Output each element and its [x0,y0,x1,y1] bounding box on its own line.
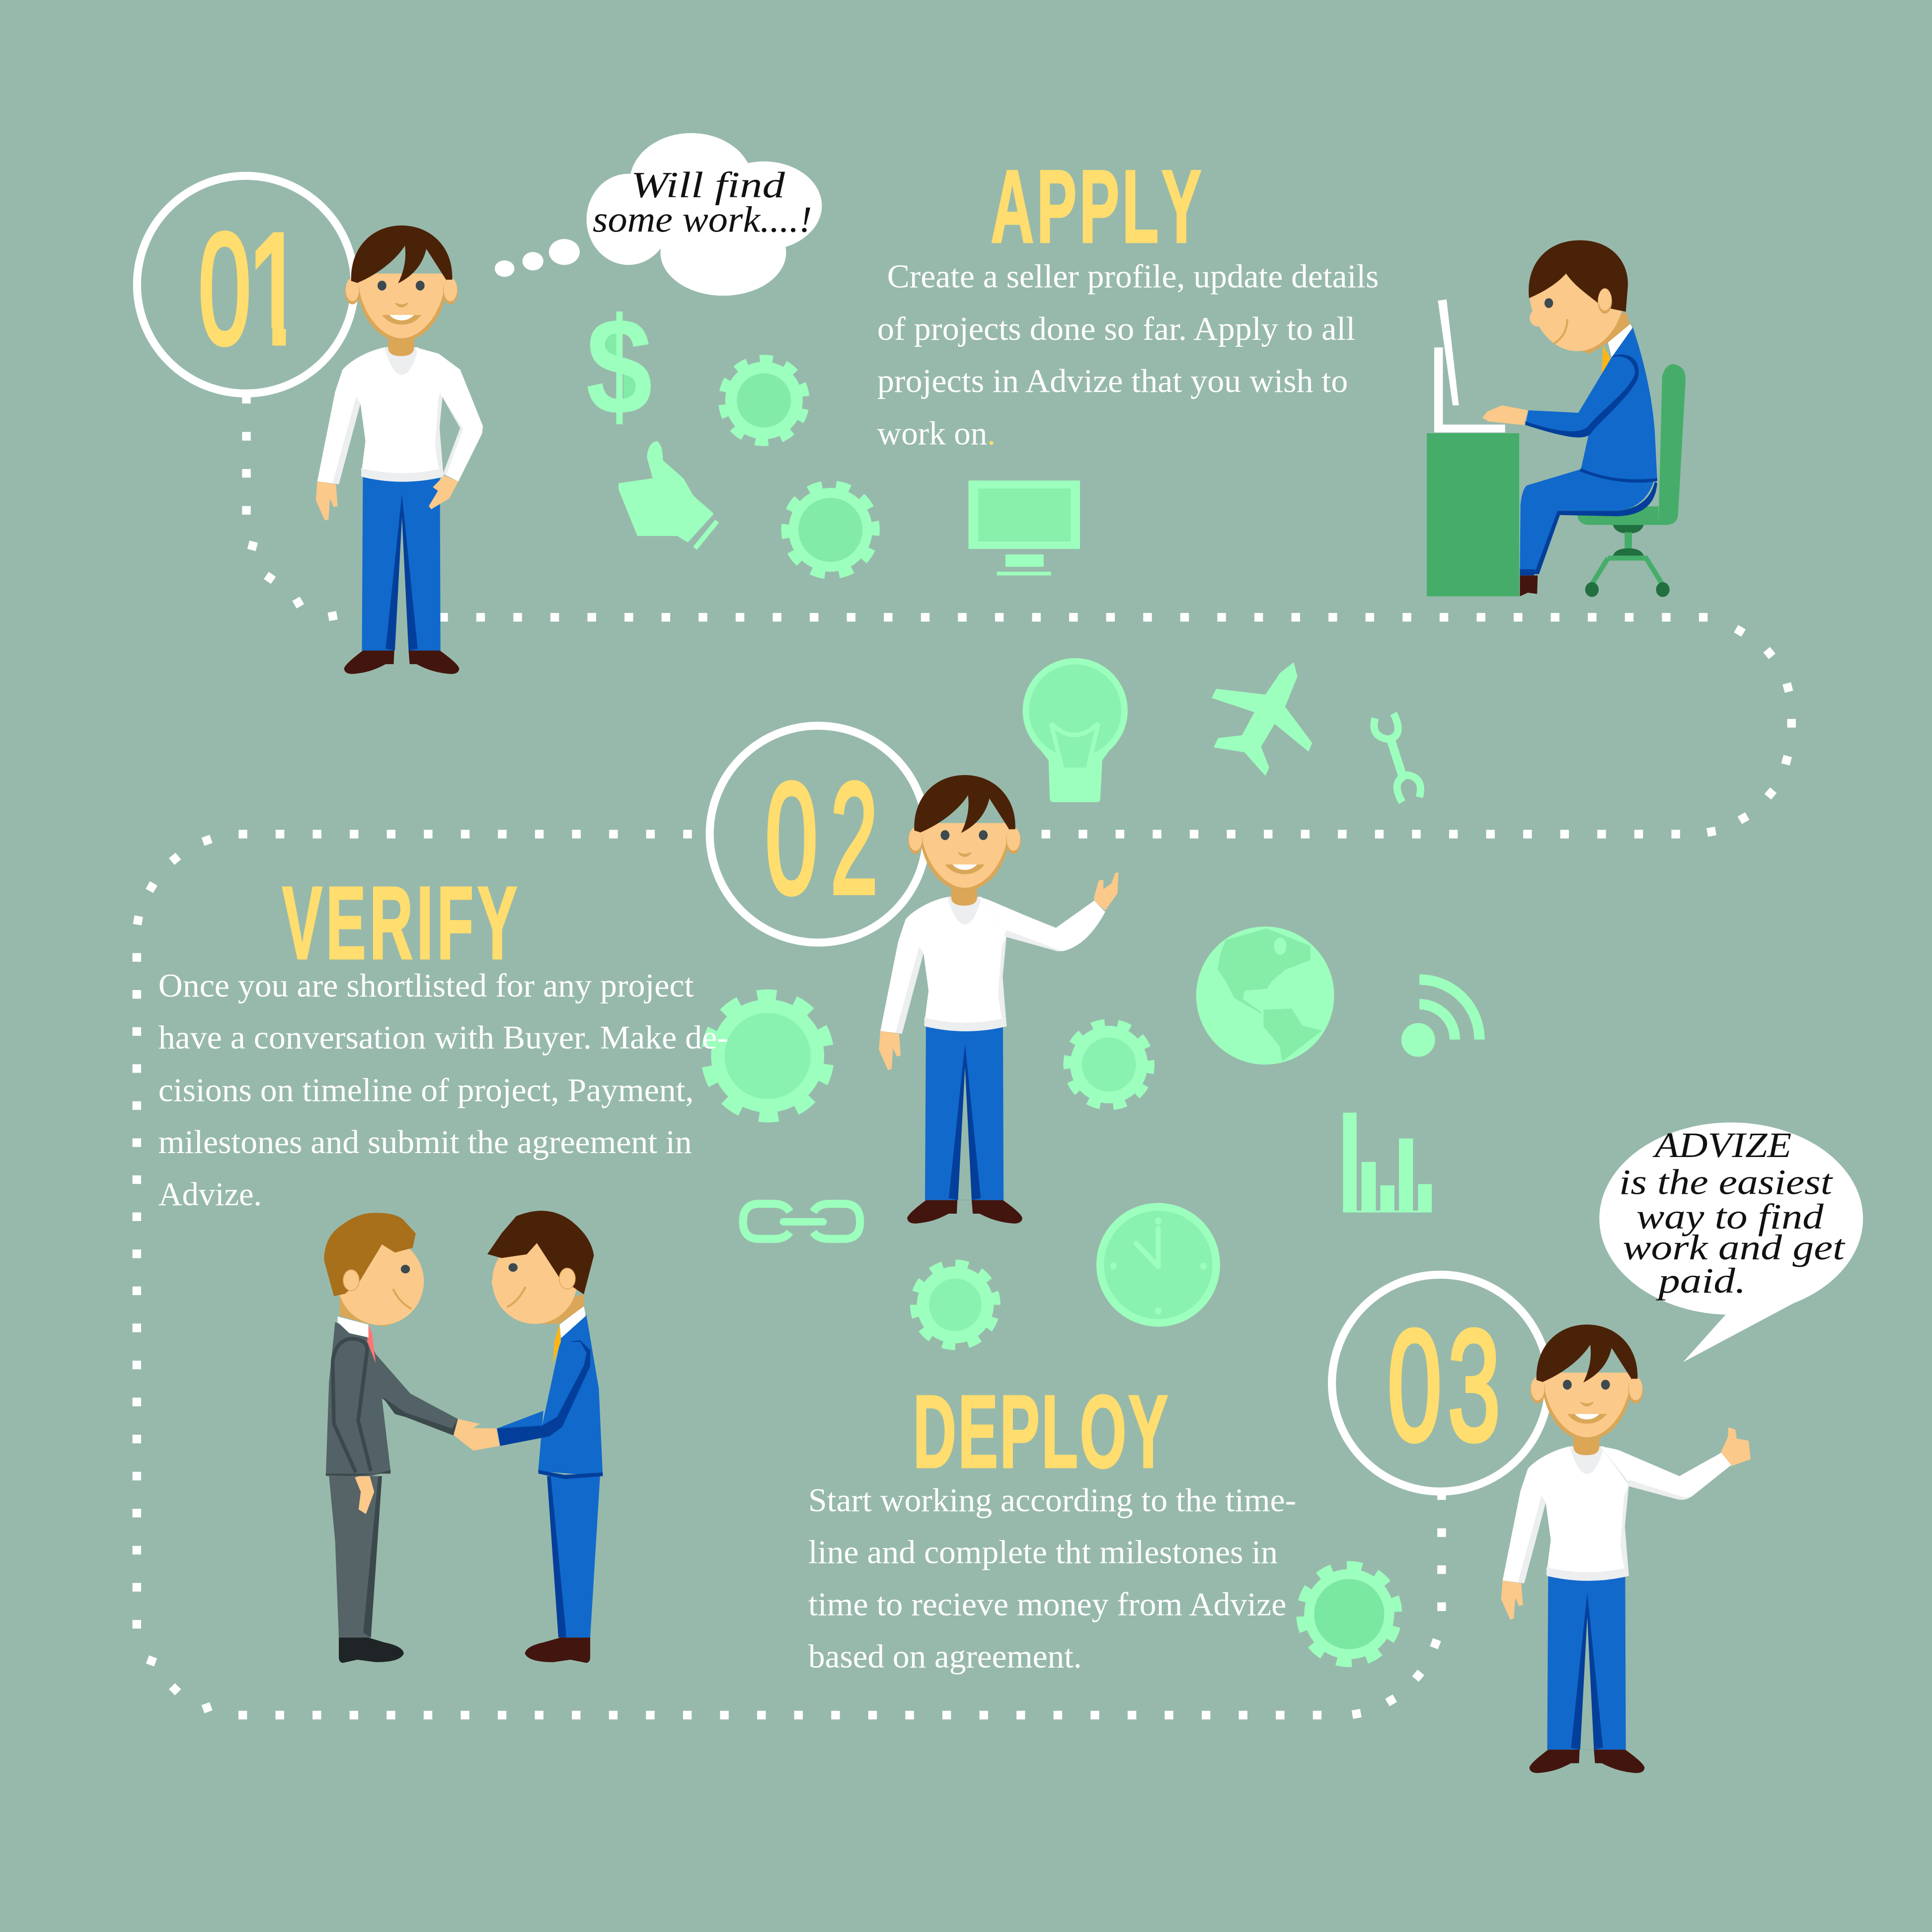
step 03 badge: 3 [1448,1298,1500,1473]
text block: apply: work on. [877,415,996,452]
text block: deploy [808,1482,1296,1675]
text block: apply [877,258,1379,452]
icon: thumbs up [620,442,717,548]
icon: wrench [1374,713,1420,802]
speech bubble: advize is the easiest way: paid. [1655,1261,1746,1301]
icon: bar chart [1343,1113,1432,1213]
dotted route connecting the three steps [133,395,1796,1719]
thought bubble: will find some work [495,133,822,296]
icon: gear top [715,352,813,449]
step 03 badge [1332,1275,1549,1491]
character 01 with hand on hip [316,226,483,674]
text block: verify: Once you are shortlisted for any project [158,967,694,1004]
step 02 badge: 0 [765,751,818,927]
speech bubble: advize is the easiest way: work and get [1623,1228,1846,1267]
icon: globe [1196,927,1334,1065]
thought bubble: will find some work: some work....! [593,199,812,240]
step 01 badge: 0 [198,201,251,377]
text block: verify: milestones and submit the agreement in [158,1124,692,1160]
step 02 badge: 2 [831,751,878,927]
character 02 with raised hand [879,775,1118,1224]
icon: dollar sign: $ [586,289,652,443]
icon: monitor [968,480,1080,575]
text block: verify: Advize. [158,1176,262,1213]
text block: deploy: Start working according to the time- [808,1482,1296,1519]
blue suit man [464,1211,603,1663]
step 03 badge: 0 [1388,1297,1442,1473]
grey suit man [324,1213,480,1663]
step 01 badge [137,176,355,393]
icon: gear lower [772,471,889,589]
text block: apply: projects in Advize that you wish to [877,363,1348,399]
icon: gear centre [1053,1008,1165,1121]
heading: APPLY: APPLY [991,149,1201,265]
heading: DEPLOY: DEPLOY [913,1374,1168,1490]
step 01 badge: 1 [247,201,305,377]
icon: clock [1096,1203,1220,1326]
icon: gear left large [700,988,835,1124]
icon: gear near deploy [1291,1556,1407,1673]
text block: verify [158,967,728,1213]
icon: chain link [743,1204,860,1239]
text block: verify: have a conversation with Buyer. Make de- [158,1019,728,1056]
speech bubble: advize is the easiest way: ADVIZE [1653,1125,1791,1165]
text block: deploy: time to recieve money from Advize [808,1586,1286,1623]
heading: VERIFY: VERIFY [282,865,517,981]
text block: apply: Create a seller profile, update details [887,258,1379,295]
icon: wifi signal [1401,980,1479,1057]
text block: apply: of projects done so far. Apply to all [877,310,1355,347]
icon: gear bottom [904,1253,1006,1356]
step 02 badge [710,726,927,942]
speech bubble: advize is the easiest way [1599,1122,1863,1362]
icon: light bulb [1023,658,1128,802]
icon: airplane [1212,662,1312,776]
speech bubble: advize is the easiest way: way to find [1636,1197,1824,1236]
speech bubble: advize is the easiest way: is the easiest [1619,1162,1833,1202]
text block: deploy: based on agreement. [808,1638,1082,1675]
character 03 with thumbs up [1501,1324,1750,1773]
text block: deploy: line and complete tht milestones in [808,1534,1278,1570]
thought bubble: will find some work: Will find [631,165,785,206]
text block: verify: cisions on timeline of project, Payment, [158,1072,694,1108]
two businessmen shaking hands [324,1211,603,1663]
seated worker at desk with laptop [1427,240,1686,597]
